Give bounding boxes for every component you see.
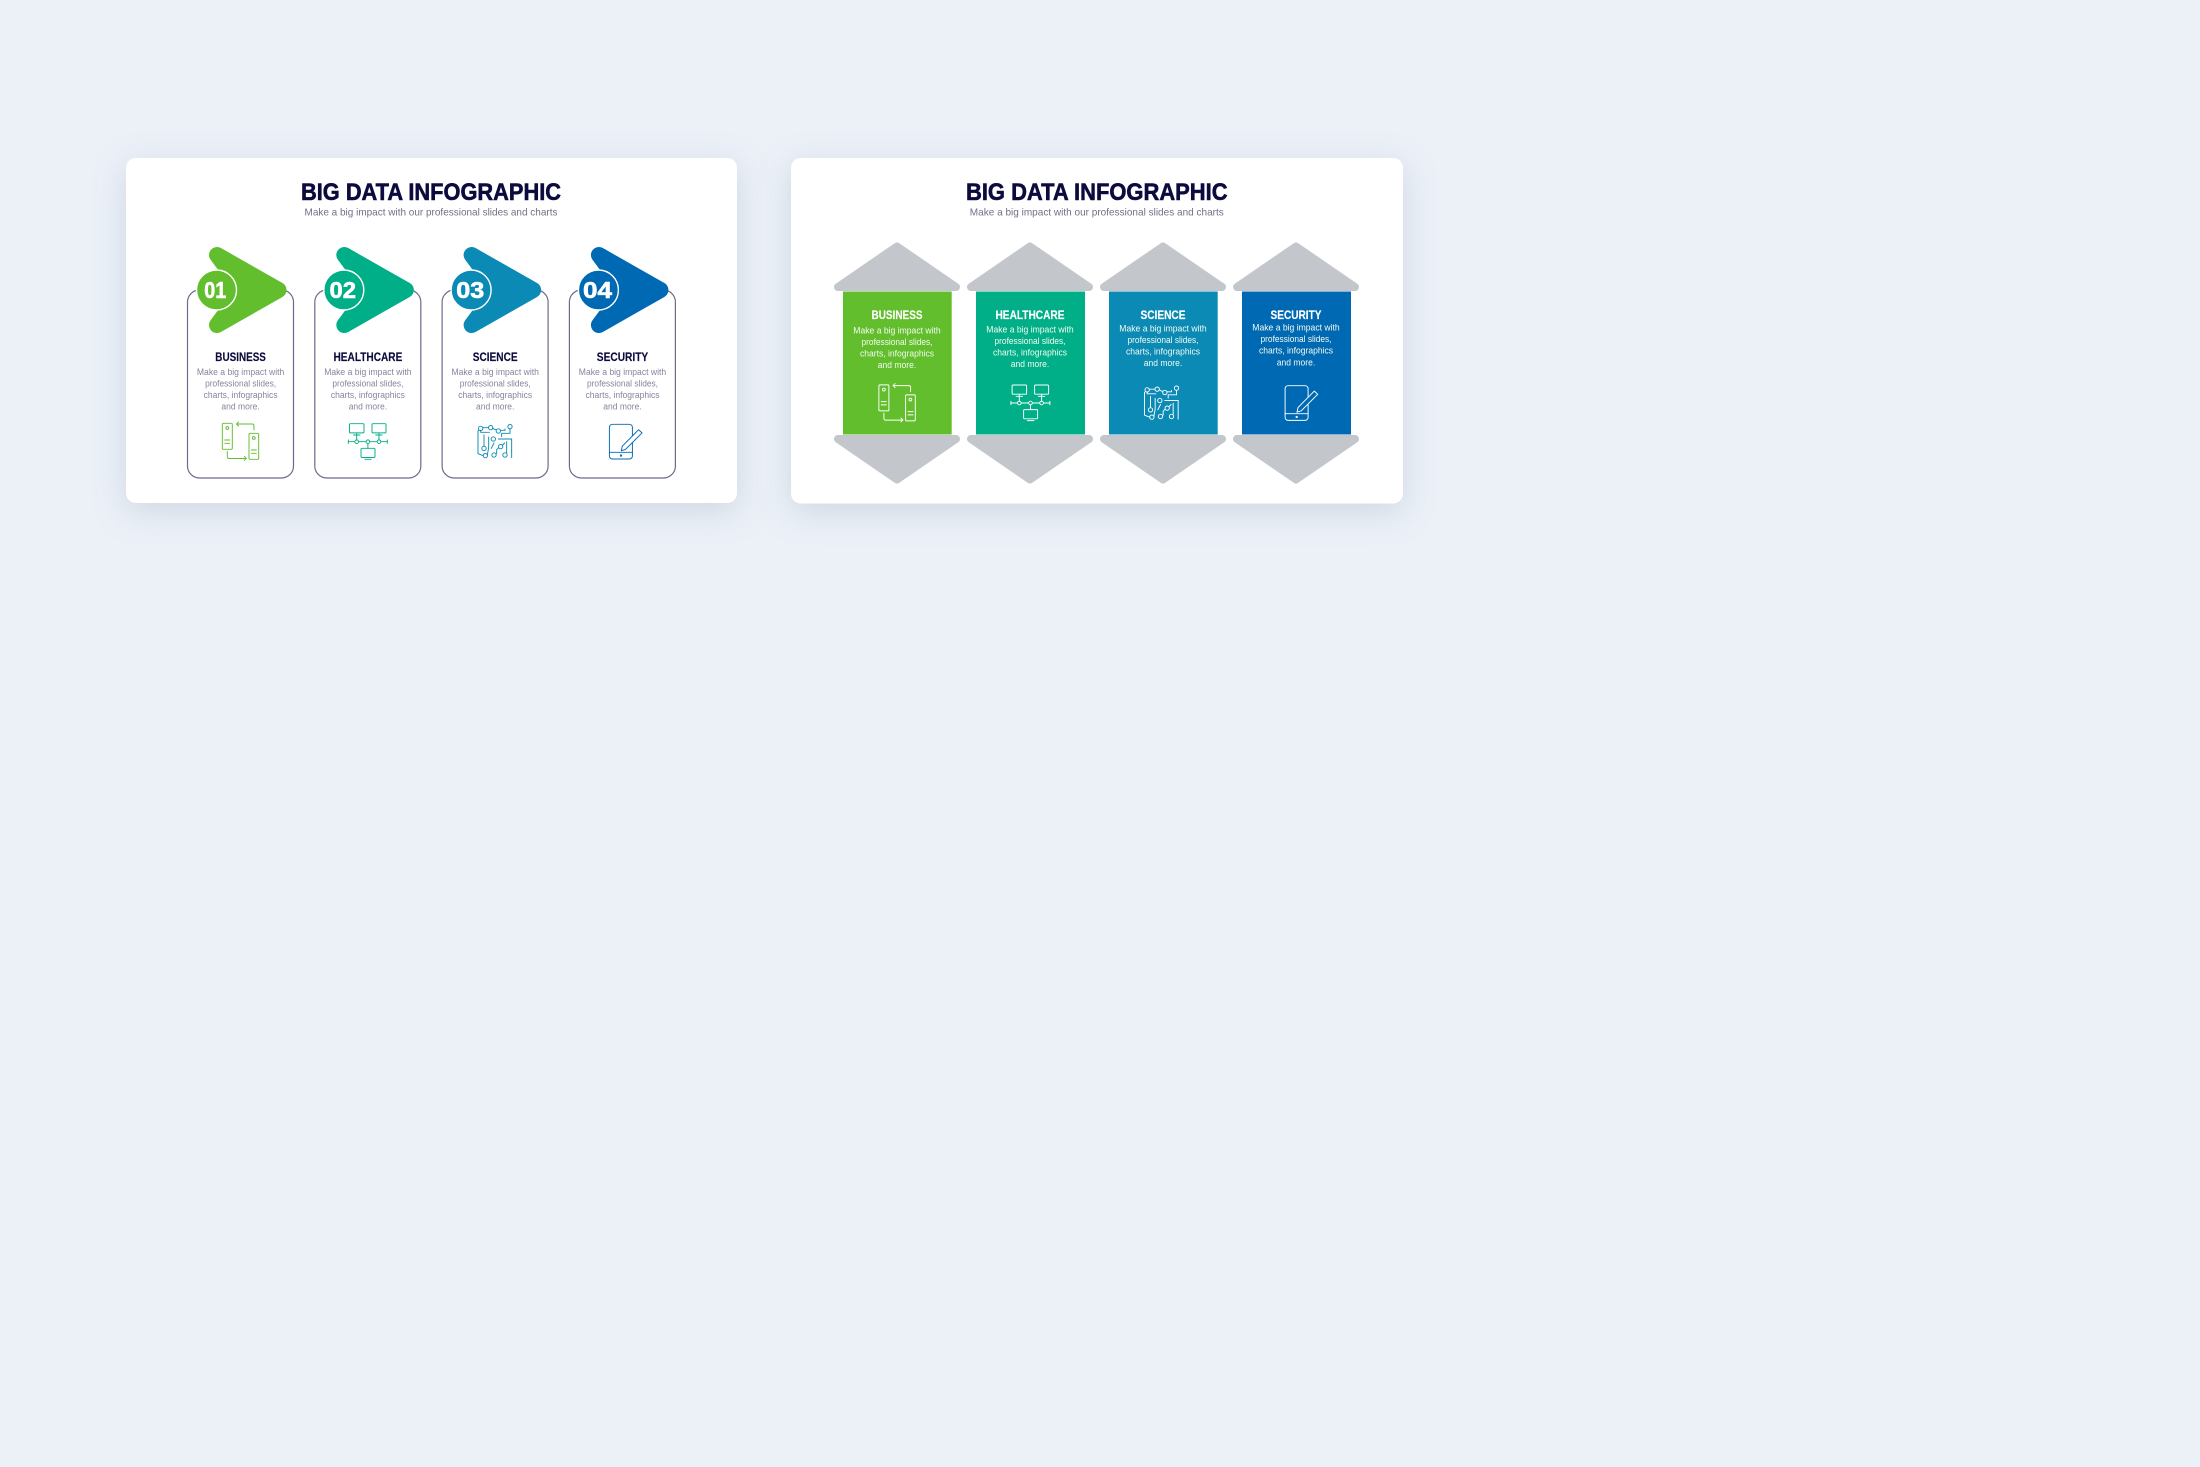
number badge 03: 03 — [456, 277, 484, 303]
colored block — [843, 292, 952, 434]
bottom arrow — [971, 439, 1089, 480]
number badge 01 — [196, 270, 236, 310]
description: charts, infographics — [204, 390, 278, 400]
description: and more. — [1144, 358, 1182, 368]
description: professional slides, — [862, 337, 932, 347]
title: BIG DATA INFOGRAPHIC — [301, 179, 561, 206]
description: charts, infographics — [586, 390, 660, 400]
description: professional slides, — [205, 378, 276, 388]
description: and more. — [476, 402, 514, 412]
card 04: security — [569, 255, 675, 478]
card 01: business — [188, 255, 294, 478]
description: professional slides, — [994, 336, 1066, 346]
column 1: business — [838, 246, 956, 480]
description: charts, infographics — [1259, 346, 1334, 356]
description: Make a big impact with — [986, 324, 1074, 334]
bottom arrow — [838, 439, 956, 480]
description: and more. — [1277, 357, 1315, 367]
colored block — [1242, 292, 1351, 434]
heading: security: SECURITY — [597, 350, 648, 364]
description: charts, infographics — [993, 347, 1068, 357]
description: Make a big impact with — [1119, 323, 1207, 333]
icon: circuit board — [1144, 386, 1179, 419]
description: professional slides, — [587, 378, 658, 388]
description: and more. — [878, 360, 916, 370]
icon: computer network — [348, 424, 387, 459]
arrow 01 — [217, 255, 278, 325]
description: and more. — [221, 402, 260, 412]
description: Make a big impact with — [197, 367, 284, 377]
heading: business: BUSINESS — [215, 350, 266, 364]
number badge 03 — [451, 270, 491, 310]
description: professional slides, — [1260, 334, 1332, 344]
description: charts, infographics — [331, 390, 405, 400]
description — [452, 367, 539, 412]
description: Make a big impact with — [324, 367, 412, 377]
description — [324, 367, 412, 412]
top arrow — [838, 246, 956, 287]
subtitle: Make a big impact with our professional slides and charts — [970, 206, 1224, 218]
description — [1119, 323, 1207, 368]
description: Make a big impact with — [579, 367, 666, 377]
description: and more. — [349, 402, 387, 412]
icon: computer network — [1011, 385, 1050, 421]
icon: tablet and pen — [609, 424, 642, 459]
column 2: healthcare — [971, 246, 1089, 480]
description: professional slides, — [460, 378, 531, 388]
number badge 01: 01 — [204, 277, 226, 303]
title: BIG DATA INFOGRAPHIC — [966, 179, 1228, 206]
icon: tablet and pen — [1285, 386, 1318, 420]
bottom arrow — [1104, 439, 1222, 480]
description: Make a big impact with — [452, 367, 539, 377]
number badge 04: 04 — [583, 277, 612, 303]
top arrow — [1104, 246, 1222, 287]
description — [853, 325, 941, 370]
description: professional slides, — [332, 378, 403, 388]
top arrow — [971, 246, 1089, 287]
number badge 04 — [578, 270, 618, 310]
description — [1252, 323, 1340, 367]
description: professional slides, — [1128, 335, 1198, 345]
arrow 02 — [344, 255, 406, 325]
description: and more. — [1011, 359, 1049, 369]
icon: servers exchanging data — [879, 384, 915, 422]
description — [197, 367, 284, 412]
description: charts, infographics — [860, 348, 935, 358]
subtitle: Make a big impact with our professional slides and charts — [304, 206, 558, 218]
description: charts, infographics — [458, 390, 533, 400]
heading: business: BUSINESS — [872, 308, 923, 322]
bottom arrow — [1237, 439, 1355, 480]
colored block — [976, 292, 1085, 434]
card 03: science — [442, 255, 548, 478]
description — [579, 367, 666, 412]
heading: healthcare: HEALTHCARE — [334, 350, 402, 364]
heading: science: SCIENCE — [1140, 308, 1186, 322]
icon: circuit board — [478, 424, 512, 458]
column 4: security — [1237, 246, 1355, 480]
number badge 02: 02 — [330, 277, 356, 303]
colored block — [1109, 292, 1218, 434]
description: and more. — [603, 402, 642, 412]
column 3: science — [1104, 246, 1222, 480]
description — [986, 324, 1074, 369]
heading: science: SCIENCE — [473, 350, 518, 364]
arrow 03 — [472, 255, 533, 325]
number badge 02 — [324, 270, 364, 310]
panel: double arrow columns slide — [791, 158, 1403, 504]
card 02: healthcare — [315, 255, 421, 478]
description: Make a big impact with — [1252, 323, 1340, 333]
panel: arrow cards slide — [126, 158, 737, 503]
description: Make a big impact with — [853, 325, 941, 335]
description: charts, infographics — [1126, 346, 1201, 356]
icon: servers exchanging data — [222, 422, 259, 460]
heading: healthcare: HEALTHCARE — [996, 308, 1065, 322]
top arrow — [1237, 246, 1355, 287]
arrow 04 — [599, 255, 660, 325]
heading: security: SECURITY — [1270, 308, 1322, 322]
